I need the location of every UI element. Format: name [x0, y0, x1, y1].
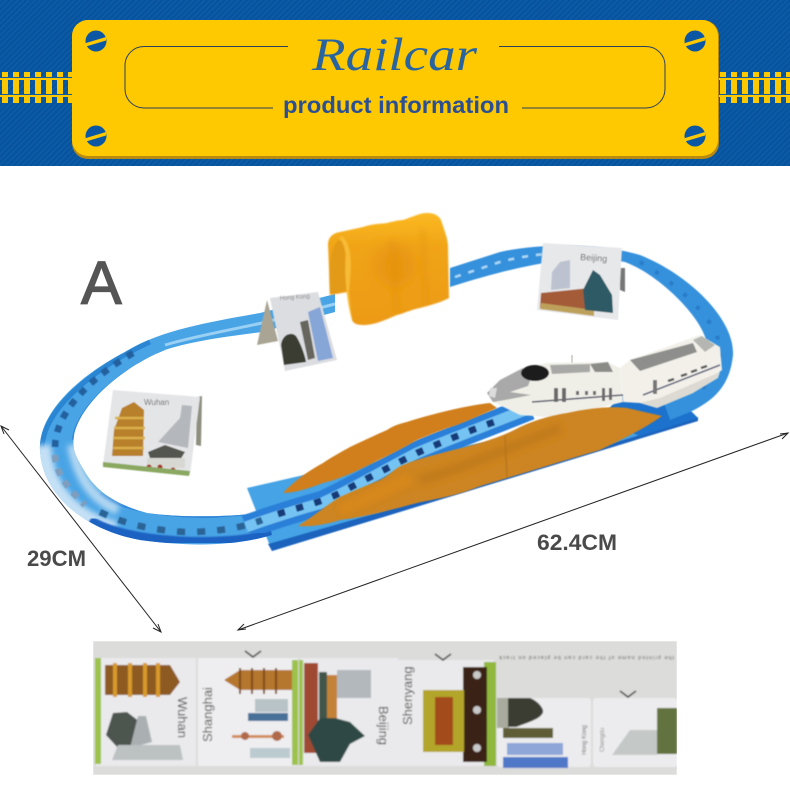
screw top right: [684, 30, 706, 52]
sticker Wuhan: [95, 658, 196, 766]
sticker Shenyang: [398, 660, 496, 766]
track right curve: [450, 246, 733, 420]
tunnel: [328, 213, 449, 325]
train antenna: [571, 355, 573, 364]
subtitle: product information: [283, 92, 509, 118]
label 62.4CM: 62.4CM: [537, 530, 617, 555]
sticker sheet: [93, 641, 677, 775]
sticker Chengdu: Chengdu: [600, 728, 606, 752]
sign Wuhan: [103, 390, 202, 476]
sticker Chengdu: [593, 698, 677, 767]
toy track set: [30, 213, 733, 551]
platform: [247, 395, 698, 551]
sign Beijing: Beijing: [580, 252, 608, 264]
label A: A: [81, 249, 122, 317]
screw top left: [86, 30, 106, 52]
sign Wuhan: Wuhan: [144, 398, 169, 407]
front mountain: [298, 407, 662, 526]
sticker Beijing: [299, 658, 398, 766]
track on platform: [246, 408, 530, 527]
screw bottom left: [86, 126, 106, 146]
sign Beijing: [537, 243, 625, 320]
back mountain: [283, 403, 497, 493]
sticker Shanghai: [198, 658, 298, 766]
yellow plate: [72, 20, 719, 159]
sticker Wuhan: Wuhan: [175, 697, 190, 738]
dimension arrow 62.4CM: [238, 433, 788, 630]
train front car: [487, 362, 623, 417]
sticker Hong Kong: Hong Kong: [582, 725, 588, 755]
rail track right: [718, 72, 790, 103]
sticker Shenyang: Shenyang: [400, 666, 415, 725]
screw bottom right: [684, 126, 706, 146]
sign Hong Kong: [257, 292, 337, 371]
train rear car: [620, 335, 722, 408]
header banner: [0, 0, 790, 166]
title Railcar: Railcar: [311, 29, 478, 81]
sticker Beijing: Beijing: [376, 706, 391, 745]
rail track left: [0, 72, 72, 103]
track left loop: [30, 285, 340, 550]
label 29CM: 29CM: [27, 546, 86, 571]
track ties: [55, 353, 500, 532]
dimension arrow 29CM: [1, 426, 161, 632]
sticker Hong Kong: [497, 698, 591, 768]
sticker Shanghai: Shanghai: [200, 687, 215, 742]
rounded outline frame: [125, 46, 665, 108]
fold marks: [245, 651, 636, 697]
fold text: the printed name of the card can be placed on track: [499, 654, 674, 660]
sign Hong Kong: Hong Kong: [280, 294, 310, 302]
